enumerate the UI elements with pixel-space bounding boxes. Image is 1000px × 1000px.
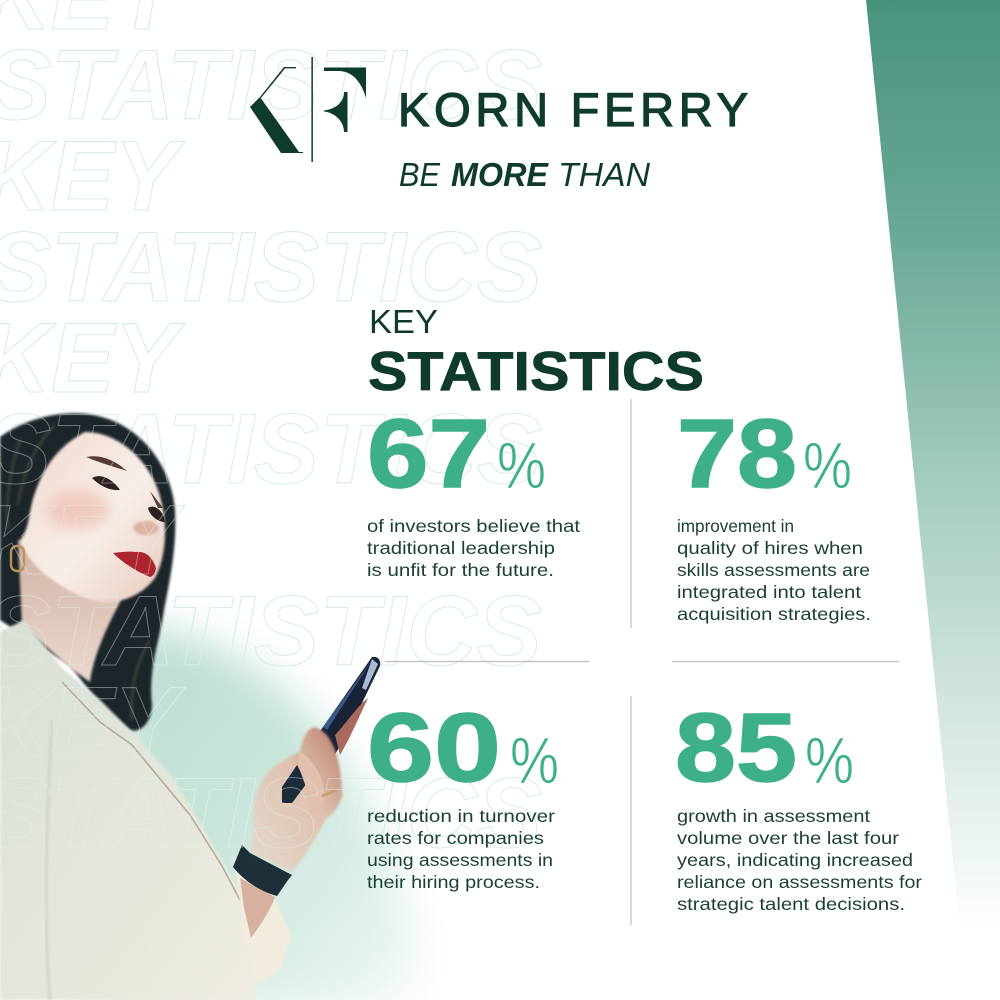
stat: 60%: reduction in turnover (367, 806, 555, 826)
stat: 60%: 60 (367, 693, 501, 802)
logo (250, 57, 748, 193)
stat: 85%: years, indicating increased (677, 850, 913, 870)
ring (322, 790, 337, 796)
stat: 67%: 67 (367, 399, 490, 508)
stat: 85%: % (805, 723, 854, 797)
watermark row STATISTICS: STATISTICS (0, 757, 542, 868)
tagline: MORE (451, 156, 549, 193)
stat: 78%: quality of hires when (677, 538, 863, 558)
stat: 60%: rates for companies (367, 828, 544, 848)
stat: 67%: is unfit for the future. (367, 560, 554, 580)
stat: 78%: 78 (677, 399, 797, 508)
tagline: THAN (558, 156, 650, 193)
green gradient wedge (866, 0, 1000, 950)
sleeve (232, 855, 290, 985)
tagline (399, 156, 650, 193)
hair (0, 413, 175, 731)
fingers (298, 752, 325, 813)
tagline: BE (399, 156, 441, 193)
nose shadow (133, 521, 159, 535)
face (20, 432, 165, 602)
watermark text (0, 0, 542, 868)
earring (11, 546, 24, 571)
stat: 78%: improvement in (677, 516, 794, 536)
watermark row STATISTICS: STATISTICS (0, 393, 542, 504)
thumb base (335, 698, 368, 755)
lapel lines (62, 682, 240, 900)
watermark row STATISTICS: STATISTICS (0, 211, 542, 322)
forearm (240, 878, 275, 938)
stat: 78%: acquisition strategies. (677, 604, 871, 624)
stat: 67%: of investors believe that (367, 516, 580, 536)
stat: 60% (367, 693, 559, 892)
eyebrows (86, 456, 163, 508)
stat: 67%: traditional leadership (367, 538, 555, 558)
stat: 85%: 85 (675, 693, 797, 802)
stat: 78%: % (803, 428, 852, 502)
watermark row STATISTICS: STATISTICS (0, 575, 542, 686)
blazer (0, 620, 290, 1000)
overlay row STATISTICS: STATISTICS (0, 757, 542, 868)
wordmark: KORN FERRY (398, 83, 748, 136)
stat: 85% (675, 693, 922, 914)
eyes (92, 476, 165, 522)
stat: 67%: % (497, 428, 546, 502)
stat: 67% (367, 399, 580, 580)
overlay row STATISTICS: STATISTICS (0, 575, 542, 686)
watermark overlay on person (0, 393, 542, 868)
heading line KEY: KEY (369, 303, 438, 340)
person photo illustration (0, 413, 380, 1000)
watermark row STATISTICS: STATISTICS (0, 29, 542, 140)
dividers (385, 399, 899, 925)
overlay row STATISTICS: STATISTICS (0, 393, 542, 504)
stat: 78%: integrated into talent (677, 582, 861, 602)
stat: 60%: % (510, 723, 559, 797)
lips (113, 552, 156, 577)
stat: 85%: growth in assessment (677, 806, 870, 826)
stat: 85%: strategic talent decisions. (677, 894, 905, 914)
heading line STATISTICS: STATISTICS (368, 340, 704, 402)
stat: 60%: their hiring process. (367, 872, 540, 892)
neck (18, 540, 140, 682)
heading (368, 303, 704, 402)
watch (233, 845, 292, 896)
phone lower part visible through fingers (282, 765, 307, 803)
mist behind person (100, 625, 425, 1000)
stat: 78% (677, 399, 871, 624)
stat: 78%: skills assessments are (677, 560, 870, 580)
icon: KF monogram (250, 57, 366, 162)
hair highlights (7, 425, 150, 720)
blush (46, 490, 110, 530)
stat: 60%: using assessments in (367, 850, 553, 870)
stat: 85%: volume over the last four (677, 828, 899, 848)
stat: 85%: reliance on assessments for (677, 872, 922, 892)
phone (300, 657, 380, 770)
hand (250, 727, 342, 872)
